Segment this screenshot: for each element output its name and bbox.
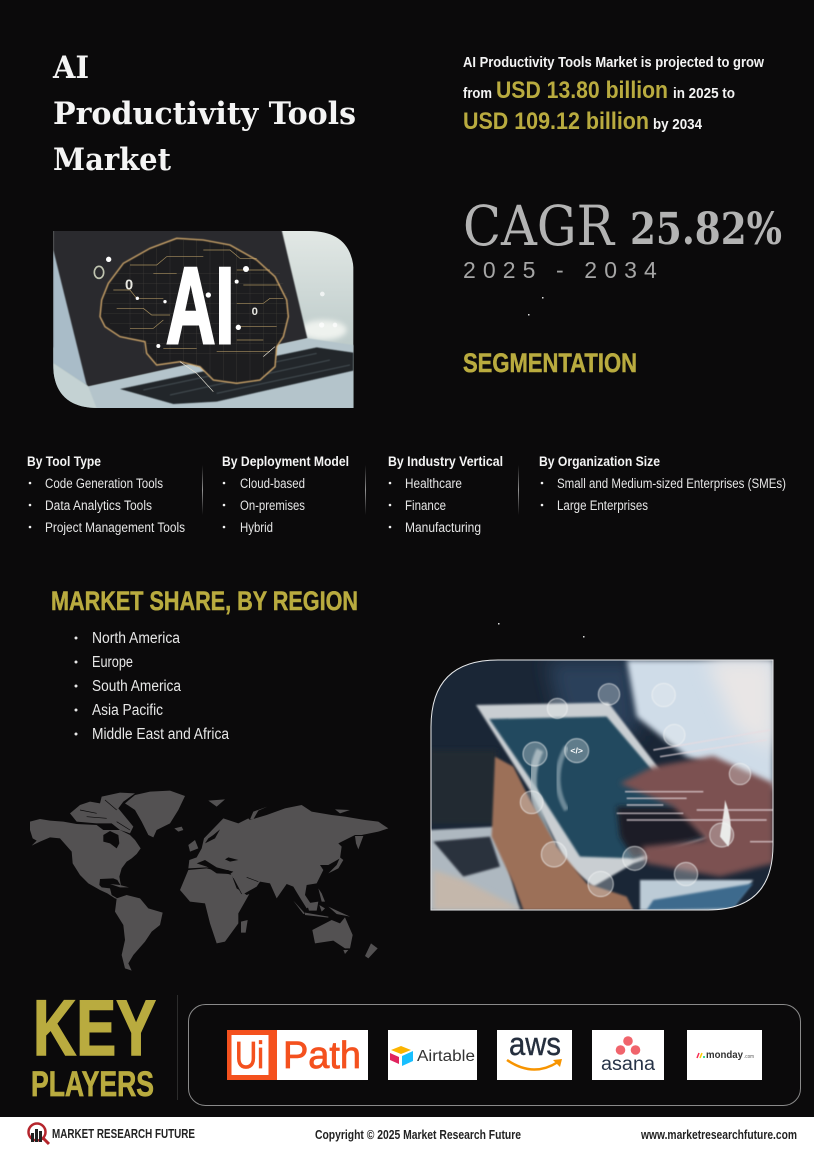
footer	[0, 1117, 814, 1150]
market growth statement: USD 109.12 billion	[463, 108, 649, 135]
region list	[74, 630, 229, 743]
title: AI	[52, 50, 89, 86]
segment: by tool type: By Tool Type	[27, 453, 101, 469]
CAGR figure	[463, 194, 782, 283]
key players heading: KEY	[33, 983, 156, 1072]
segment: by organization size	[539, 453, 786, 513]
CAGR figure: 25.82%	[630, 204, 782, 255]
logo: monday.com	[687, 1030, 762, 1080]
footer: MARKET RESEARCH FUTURE	[52, 1126, 195, 1141]
image: hand holding tablet with code	[430, 660, 773, 910]
segment: by tool type: Code Generation Tools	[45, 476, 163, 491]
region list: Middle East and Africa	[92, 726, 229, 743]
segment: by deployment model: On-premises	[240, 498, 305, 513]
title	[52, 50, 356, 178]
panel: key player logos	[188, 1004, 800, 1106]
logo: AWS: aws	[509, 1026, 561, 1062]
code symbol on tablet: </>	[570, 746, 583, 756]
logo: UiPath	[227, 1030, 368, 1080]
key players heading: PLAYERS	[31, 1065, 154, 1104]
logo: Airtable: Airtable	[417, 1048, 475, 1065]
segment: by deployment model	[222, 453, 349, 535]
market share heading: MARKET SHARE, BY REGION	[51, 586, 358, 616]
segment: by deployment model: Cloud-based	[240, 476, 305, 491]
segment: by organization size: Large Enterprises	[557, 498, 648, 513]
segment: by industry vertical: By Industry Vertical	[388, 453, 503, 469]
logo: Airtable	[388, 1030, 477, 1080]
region list: South America	[92, 678, 181, 695]
market growth statement: USD 13.80 billion	[496, 77, 668, 104]
"AI" lettering: AI	[166, 246, 234, 367]
logo: UiPath: Ui	[235, 1035, 264, 1077]
logo: Asana: asana	[601, 1054, 655, 1075]
region list: Europe	[92, 654, 133, 671]
world map	[30, 791, 388, 971]
footer: Copyright © 2025 Market Research Future	[315, 1127, 521, 1142]
image: AI brain over laptop	[53, 230, 353, 408]
segment: by tool type: Project Management Tools	[45, 520, 185, 535]
market growth statement: from	[463, 85, 492, 102]
segment: by industry vertical	[388, 453, 503, 535]
logo: Market Research Future	[28, 1124, 49, 1144]
region list: Asia Pacific	[92, 702, 163, 719]
title: Productivity Tools	[53, 96, 356, 132]
logo: monday.com: monday	[706, 1050, 743, 1061]
CAGR figure: 2025 - 2034	[463, 257, 664, 283]
logo: monday.com: .com	[744, 1054, 754, 1060]
logo: UiPath: Path	[283, 1035, 361, 1077]
segment: by tool type: Data Analytics Tools	[45, 498, 152, 513]
region list: North America	[92, 630, 180, 647]
key players heading	[31, 983, 156, 1104]
market growth statement: in 2025 to	[673, 85, 735, 102]
segment: by deployment model: Hybrid	[240, 520, 273, 535]
title: Market	[53, 142, 172, 178]
segment: by tool type	[27, 453, 185, 535]
market growth statement: by 2034	[653, 116, 703, 133]
image: AI brain over laptop: 0	[125, 277, 133, 293]
logo: AWS	[497, 1026, 572, 1080]
segment: by organization size: By Organization Size	[539, 453, 660, 469]
segment: by industry vertical: Healthcare	[405, 476, 462, 491]
segment: by industry vertical: Manufacturing	[405, 520, 481, 535]
segment: by industry vertical: Finance	[405, 498, 446, 513]
logo: Asana	[592, 1030, 664, 1080]
market growth statement	[463, 54, 764, 135]
segment: by deployment model: By Deployment Model	[222, 453, 349, 469]
specks	[498, 297, 584, 638]
segmentation heading: SEGMENTATION	[463, 348, 637, 378]
CAGR figure: CAGR	[463, 194, 615, 258]
market growth statement: AI Productivity Tools Market is projected to grow	[463, 54, 764, 71]
image: AI brain over laptop: 0	[252, 306, 258, 318]
